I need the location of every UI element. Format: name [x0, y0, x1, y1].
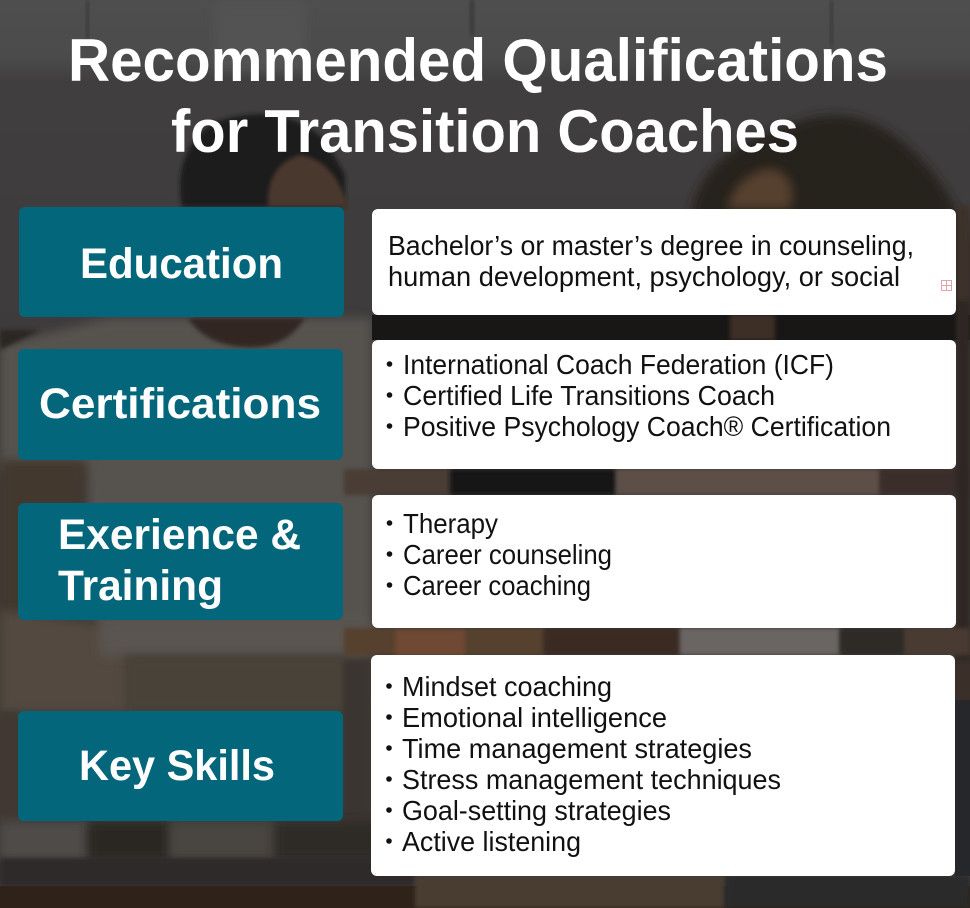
woman [692, 115, 970, 340]
panel: key skills list [371, 655, 955, 876]
man [0, 318, 372, 650]
man's head [180, 114, 345, 207]
panel: key skills label [18, 711, 343, 821]
panel: certifications label: Certifications [39, 380, 321, 428]
panel: key skills label: Key Skills [79, 742, 275, 790]
panel: certifications list: Positive Psychology Coach® Certification [403, 411, 891, 442]
panel: experience and training label: Training [58, 562, 223, 610]
panel: experience and training label: Exerience & [58, 511, 301, 559]
panel: experience and training label [18, 503, 343, 620]
panel: education label: Education [80, 240, 283, 288]
panel: education details: Bachelor’s or master’s degree in counseling, [388, 230, 914, 261]
panel: education label [19, 207, 344, 317]
title [68, 27, 888, 165]
title: for Transition Coaches [171, 98, 799, 165]
panel: certifications list: International Coach Federation (ICF) [403, 349, 834, 380]
panel: education details: human development, psychology, or social [388, 261, 900, 292]
panel: experience and training list: Therapy [403, 508, 498, 539]
gap strips [372, 315, 970, 340]
panel: key skills list: Goal-setting strategies [402, 795, 671, 826]
panel: key skills list: Active listening [402, 826, 581, 857]
panel: key skills list: Stress management techniques [402, 764, 781, 795]
icon: overflow marker [942, 280, 952, 290]
panel: experience and training list: Career coaching [403, 570, 591, 601]
panel: key skills list: Mindset coaching [402, 671, 612, 702]
panel: key skills list: Time management strategies [402, 733, 752, 764]
panel: certifications list [372, 340, 956, 469]
panel: key skills list: Emotional intelligence [402, 702, 667, 733]
panel: certifications label [18, 349, 343, 460]
panel: experience and training list [372, 495, 956, 628]
panel: experience and training list: Career counseling [403, 539, 612, 570]
title: Recommended Qualifications [68, 27, 888, 94]
panel: education details [372, 209, 956, 315]
panel: certifications list: Certified Life Transitions Coach [403, 380, 775, 411]
